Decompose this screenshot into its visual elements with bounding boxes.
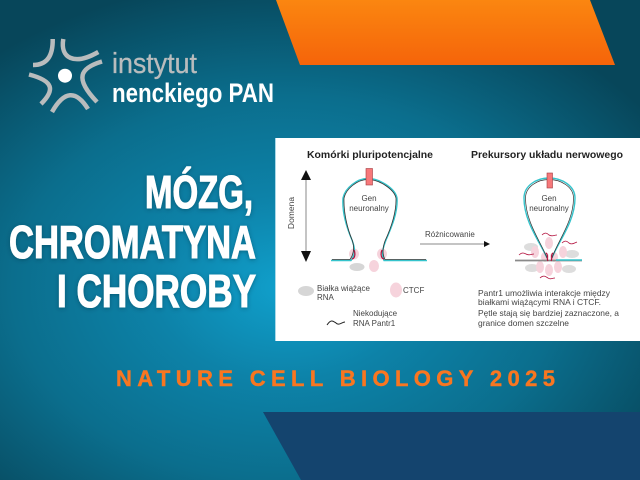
description: Pętle stają się bardziej zaznaczone, a	[478, 308, 619, 318]
label: domain: Domena	[286, 197, 296, 229]
legend: CTCF	[403, 286, 424, 295]
label: neuronal gene, left: neuronalny	[349, 204, 389, 213]
arrow: differentiation: Różnicowanie	[425, 230, 475, 239]
arrow: domain	[301, 170, 311, 262]
legend	[298, 282, 424, 328]
description: Pantr1 umożliwia interakcje między	[478, 288, 611, 298]
panel: diagram	[275, 138, 640, 341]
legend: RNA	[317, 293, 335, 302]
heading: pluripotent cells: Komórki pluripotencjalne	[307, 149, 433, 161]
description: białkami wiążącymi RNA i CTCF.	[478, 297, 601, 307]
title: CHROMATYNA	[9, 216, 256, 268]
journal caption: NATURE CELL BIOLOGY 2025	[116, 366, 555, 391]
arrow: differentiation	[420, 230, 490, 247]
label: neuronal gene, left: Gen	[361, 194, 377, 203]
logo	[29, 39, 274, 112]
description	[478, 288, 619, 328]
icon: logo star	[29, 39, 102, 112]
title: I CHOROBY	[57, 265, 256, 317]
protein symbols below loop	[350, 260, 379, 272]
heading: neural precursors: Prekursory układu nerwowego	[471, 149, 623, 161]
logo wordmark bottom: nenckiego PAN	[112, 78, 274, 108]
label: neuronal gene, right: Gen	[541, 194, 557, 203]
legend: Niekodujące	[353, 309, 398, 318]
description: granice domen szczelne	[478, 318, 569, 328]
loop: right	[515, 173, 582, 279]
title	[9, 166, 256, 317]
orange banner	[276, 0, 615, 65]
label: neuronal gene, right	[529, 194, 569, 213]
RNA squiggles	[519, 233, 577, 279]
title: MÓZG,	[145, 166, 253, 218]
logo wordmark top: instytut	[112, 48, 197, 80]
loop: left	[331, 168, 427, 260]
proteins	[524, 237, 579, 276]
legend: RNA Pantr1	[353, 319, 396, 328]
label: neuronal gene, right: neuronalny	[529, 204, 569, 213]
navy banner	[263, 412, 640, 480]
label: neuronal gene, left	[349, 194, 389, 213]
legend: Białka wiążące	[317, 284, 370, 293]
